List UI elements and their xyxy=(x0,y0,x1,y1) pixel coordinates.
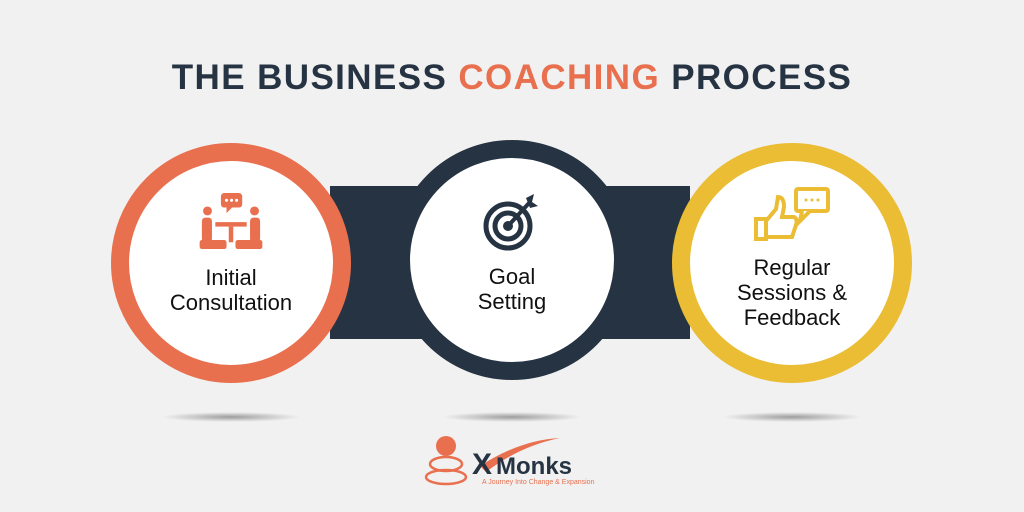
shadows xyxy=(161,412,301,422)
step 3: regular sessions & feedback xyxy=(672,143,912,383)
label xyxy=(737,255,847,330)
label xyxy=(170,265,292,315)
logo: XMonks xyxy=(424,436,595,486)
logo: XMonks: A Journey Into Change & Expansion xyxy=(482,479,595,486)
label: Regular xyxy=(753,255,831,280)
label: Sessions & xyxy=(737,280,847,305)
title: THE BUSINESS COACHING PROCESS xyxy=(172,58,852,97)
label: Feedback xyxy=(744,305,840,330)
label: Goal xyxy=(489,264,535,289)
step 2: goal setting xyxy=(392,140,632,380)
step 1: initial consultation xyxy=(111,143,351,383)
label: Setting xyxy=(478,289,546,314)
label: Consultation xyxy=(170,290,292,315)
logo: XMonks: Monks xyxy=(496,453,572,480)
connector band xyxy=(330,186,690,339)
label: Initial xyxy=(205,265,257,290)
icon: thumbs up with chat xyxy=(754,187,830,241)
label xyxy=(478,264,546,314)
icon: meeting xyxy=(200,193,262,249)
icon: target xyxy=(484,194,538,250)
logo: XMonks: X xyxy=(472,448,492,481)
